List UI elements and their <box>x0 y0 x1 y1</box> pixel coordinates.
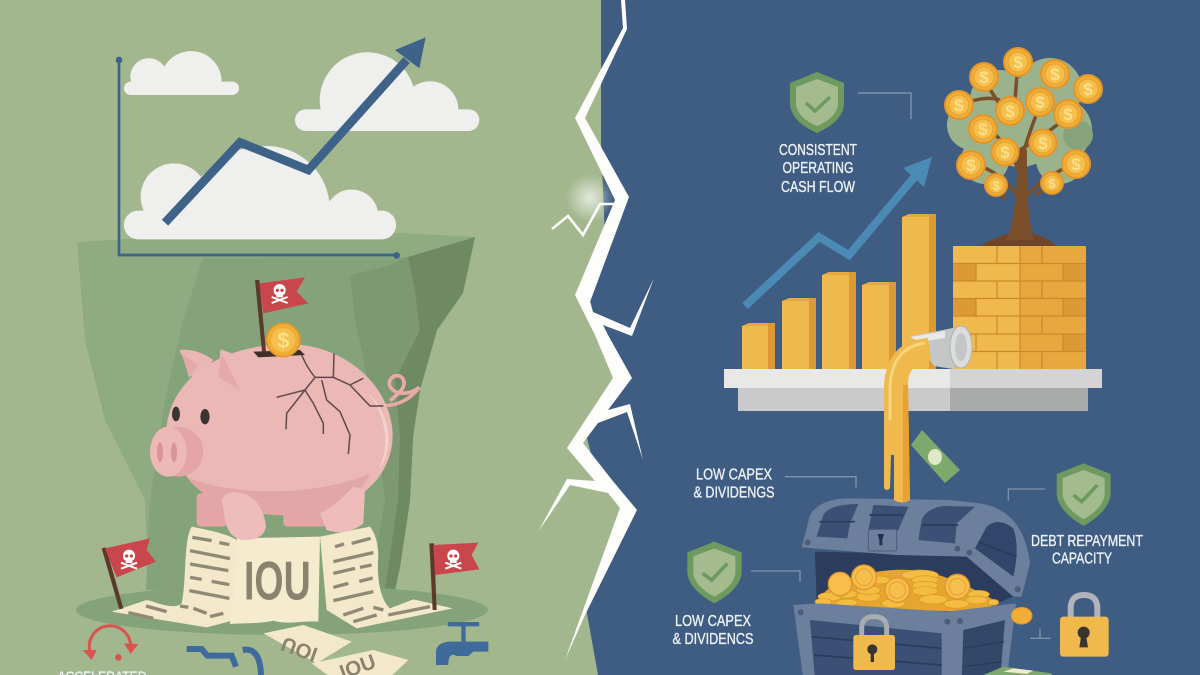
paper: loose IOU note one: IOU <box>278 632 321 666</box>
connector lines <box>751 477 1051 638</box>
icon: flying banknote <box>911 430 960 483</box>
text: low capex and dividends upper: & DIVIDENGS <box>694 484 774 502</box>
shield: debt repayment <box>1057 463 1111 526</box>
paper: right scroll <box>320 527 453 628</box>
pig ear right <box>218 349 240 390</box>
panel: risky side illustration <box>58 37 488 675</box>
falling coin <box>1011 607 1032 624</box>
coin pile <box>815 565 999 612</box>
text: low capex and dividends lower: LOW CAPEX <box>675 613 751 630</box>
paper: loose IOU note one <box>263 625 352 666</box>
tree coins: $ <box>992 178 1000 193</box>
text: debt repayment capacity: CAPACITY <box>1052 550 1112 568</box>
chest interior <box>815 552 1013 603</box>
paper: loose IOU note two <box>312 650 408 675</box>
pig eyes <box>172 407 210 424</box>
line chart with clouds <box>116 37 479 259</box>
tree coins: $ <box>1050 65 1060 84</box>
tree coins: $ <box>1000 143 1010 162</box>
chest body <box>793 603 1016 675</box>
pig tail <box>377 376 419 406</box>
chest lid <box>802 498 1030 597</box>
tree coins: $ <box>1063 105 1073 124</box>
money tree <box>945 48 1102 246</box>
tree trunk and branches <box>960 62 1075 246</box>
icon: broken blue pipe <box>187 649 261 675</box>
shield: consistent cash flow <box>790 72 844 133</box>
paper: central IOU note: IOU <box>244 549 311 611</box>
icon: skull and crossbones right <box>445 550 461 569</box>
bar four <box>862 282 896 369</box>
cliff <box>77 232 475 590</box>
text: low capex and dividends upper: LOW CAPEX <box>696 466 772 484</box>
panel: safe side illustration <box>672 48 1143 675</box>
golden liquid stream <box>884 338 931 502</box>
red flag left <box>102 538 156 609</box>
pig ear back <box>179 350 214 377</box>
treasure chest <box>687 463 1111 675</box>
tree foliage <box>947 58 1093 184</box>
icon: skull and crossbones <box>272 284 288 303</box>
pig snout <box>150 427 203 477</box>
text: debt repayment capacity <box>1031 533 1143 568</box>
tree coins: $ <box>1005 102 1015 121</box>
pig body <box>167 344 393 515</box>
text: consistent operating cash flow: OPERATING <box>782 160 854 177</box>
icon: dripping faucet <box>436 622 488 665</box>
padlock on chest <box>853 617 895 670</box>
pig front legs <box>222 487 365 540</box>
pipe <box>910 326 972 369</box>
ground shadow <box>76 585 488 635</box>
text: consistent operating cash flow <box>779 142 857 196</box>
tree coins: $ <box>979 68 989 87</box>
text: consistent operating cash flow: CONSISTENT <box>779 142 857 159</box>
bar one <box>742 323 775 369</box>
tree coins <box>945 48 1102 196</box>
bar two <box>782 298 816 369</box>
icon: accelerated arrows <box>83 626 138 661</box>
arrow: blue growth arrow <box>745 157 932 306</box>
paper: central IOU note <box>230 537 320 624</box>
paper: left scroll <box>112 527 237 627</box>
tree coins: $ <box>966 156 976 175</box>
bar five <box>902 214 936 369</box>
text: consistent operating cash flow: CASH FLOW <box>781 179 856 196</box>
arrow: rising trend line <box>165 37 426 223</box>
panel: risky side background <box>0 0 628 675</box>
cloud: top left <box>124 51 239 95</box>
red flag right <box>429 543 479 610</box>
piggy bank <box>150 277 419 540</box>
coin entering slot <box>267 323 300 357</box>
pig back legs <box>197 493 327 527</box>
lightning divider <box>538 0 654 660</box>
tree coins: $ <box>954 96 964 115</box>
tree coins: $ <box>978 120 988 139</box>
pipe and golden liquid <box>884 326 972 502</box>
cloud: top right <box>295 52 479 131</box>
cloud: large <box>124 146 396 239</box>
pig ear left inner <box>182 353 198 378</box>
text: low capex and dividends lower: & DIVIDENCS <box>672 631 754 648</box>
cash stack <box>983 667 1052 675</box>
padlock on right <box>1060 595 1109 657</box>
text: debt repayment capacity: DEBT REPAYMENT <box>1031 533 1143 550</box>
IOU papers <box>83 527 488 675</box>
bar chart and shelf <box>724 214 1102 411</box>
text: low capex and dividends upper <box>694 466 774 502</box>
chart axes <box>116 57 400 259</box>
brick wall <box>953 246 1086 369</box>
main lightning bolt <box>538 0 654 660</box>
tree coins: $ <box>1083 80 1093 99</box>
text: low capex and dividends lower <box>672 613 754 648</box>
flag on pig <box>255 277 308 352</box>
tree coins: $ <box>1013 53 1023 72</box>
small lightning branch <box>552 204 615 235</box>
pig cracks <box>277 353 383 454</box>
shield: low capex <box>687 542 742 603</box>
bar three <box>822 272 856 369</box>
coin slot <box>253 350 305 357</box>
shelf <box>724 369 1102 411</box>
connector: shield to tree <box>858 93 911 119</box>
tree coins: $ <box>1038 134 1048 153</box>
icon: skull and crossbones left <box>121 550 137 569</box>
glow at strike point <box>566 174 614 222</box>
tree coins: $ <box>1048 176 1056 191</box>
tree coins: $ <box>1035 93 1045 112</box>
tree coins: $ <box>1071 155 1081 174</box>
coin entering slot: $ <box>277 328 289 353</box>
